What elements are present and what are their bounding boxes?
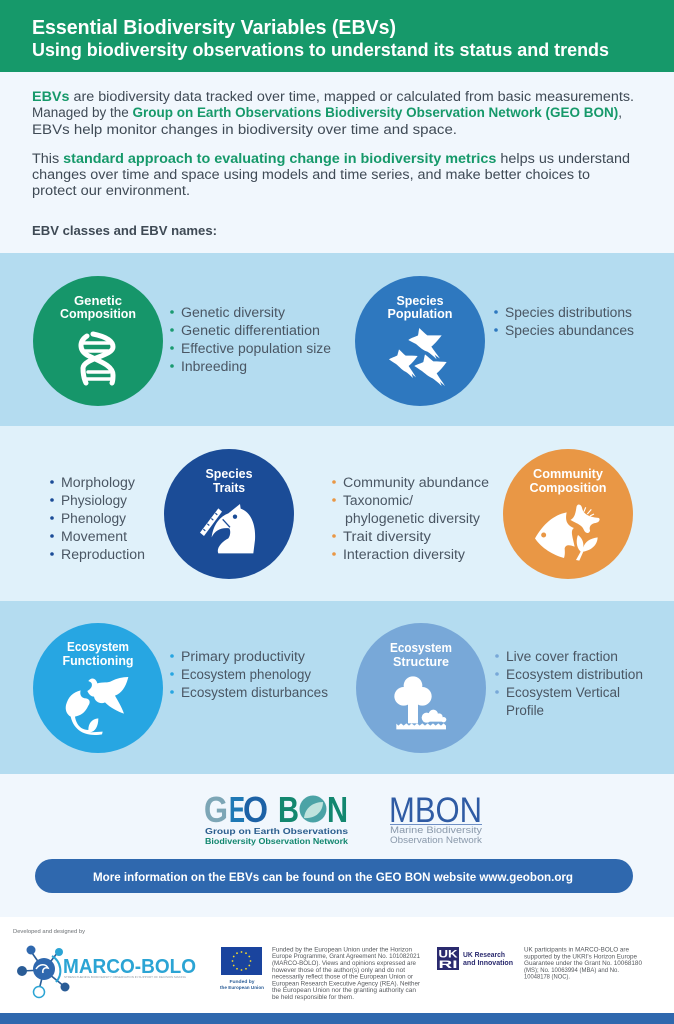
logo: MARCO-BOLO: STRENGTHENING BIODIVERSITY OBSERVATION IN SUPPORT OF DECISION MAKING <box>64 975 187 979</box>
list: genetic composition: Genetic diversity <box>181 305 285 320</box>
intro paragraph 1: Managed by the Group on Earth Observations Biodiversity Observation Network (GEO BON), <box>32 105 622 120</box>
logo: GEO BON: O <box>243 789 268 830</box>
logo: UKRI <box>437 947 513 971</box>
list: species traits: Reproduction <box>61 547 145 562</box>
UK funding statement: Guarantee under the Grant No. 10068180 <box>524 960 643 967</box>
intro paragraph 2: changes over time and space using models and time series, and make better choices to <box>32 167 590 182</box>
list: ecosystem functioning <box>170 649 328 700</box>
footer <box>0 917 674 1013</box>
list: species traits: Movement <box>61 529 127 544</box>
list: ecosystem structure <box>495 649 643 718</box>
panel: ecosystem structure: Ecosystem <box>390 641 452 655</box>
intro paragraph 2 <box>32 151 630 198</box>
panel: species traits: Traits <box>213 481 245 495</box>
list: species traits <box>50 475 145 562</box>
logo: European Union flag: the European Union <box>220 985 264 990</box>
list: community composition: phylogenetic diversity <box>345 511 480 526</box>
panel: species population <box>355 276 485 406</box>
list: ecosystem functioning: Ecosystem phenology <box>181 667 311 682</box>
logo: UKRI: UK <box>438 948 458 960</box>
funding statement: however those of the author(s) only and do not <box>272 967 405 974</box>
logo: MBON: MBON <box>389 791 482 830</box>
list: species traits: Physiology <box>61 493 127 508</box>
UK funding statement: supported by the UKRI's Horizon Europe <box>524 954 638 960</box>
logo: GEO BON: Biodiversity Observation Network <box>205 837 349 846</box>
funding statement: European Research Executive Agency (REA). Neither <box>272 980 420 988</box>
list: species traits: Phenology <box>61 511 126 526</box>
funding statement: necessarily reflect those of the European Union or <box>272 974 413 980</box>
list: community composition: Trait diversity <box>343 529 431 544</box>
section heading: EBV classes and EBV names: <box>32 223 217 238</box>
title: Essential Biodiversity Variables (EBVs) <box>32 17 396 39</box>
intro paragraph 2: This standard approach to evaluating change in biodiversity metrics helps us understand <box>32 151 630 166</box>
list: ecosystem functioning: Primary productivity <box>181 649 305 664</box>
logo: GEO BON: Group on Earth Observations <box>205 827 349 836</box>
UK funding statement: UK participants in MARCO-BOLO are <box>524 946 630 954</box>
intro paragraph 1: EBVs are biodiversity data tracked over time, mapped or calculated from basic measurements. <box>32 89 634 104</box>
panel: ecosystem functioning: Functioning <box>62 654 134 668</box>
funding statement: (MARCO-BOLO). Views and opinions expressed are <box>272 960 417 967</box>
list: community composition: Taxonomic/ <box>343 493 413 508</box>
logo: UKRI: UK Research <box>463 952 505 959</box>
list: species population: Species distributions <box>505 305 632 320</box>
intro paragraph 1: EBVs help monitor changes in biodiversity over time and space. <box>32 122 457 137</box>
footer: Developed and designed by <box>13 929 85 935</box>
logo: GEO BON: N <box>327 789 348 830</box>
funding statement: the European Union nor the granting authority can <box>272 987 417 994</box>
panel: species population: Population <box>388 307 452 321</box>
logo: MARCO-BOLO: MARCO-BOLO <box>63 956 196 978</box>
UK funding statement: (MS); No. 10063994 (MBA) and No. <box>524 967 619 974</box>
logo: UKRI: and Innovation <box>463 960 513 967</box>
icon: tree and bush <box>394 676 446 729</box>
list: species traits: Morphology <box>61 475 135 490</box>
panel: ecosystem structure <box>356 623 486 753</box>
icon: dna helix <box>81 334 113 383</box>
logo: MBON <box>389 791 483 845</box>
list: ecosystem functioning: Ecosystem disturbances <box>181 685 328 700</box>
logo: MARCO-BOLO <box>17 946 196 998</box>
list: ecosystem structure: Profile <box>506 703 544 718</box>
logo: MBON: Observation Network <box>390 835 483 845</box>
panel: ecosystem functioning <box>33 623 163 753</box>
logo: European Union flag <box>220 947 264 990</box>
UK funding statement: 10048178 (NOC). <box>524 974 570 980</box>
logo: MBON: Marine Biodiversity <box>390 825 483 835</box>
panel: community composition: Community <box>533 467 603 481</box>
list: ecosystem structure: Live cover fraction <box>506 649 618 664</box>
panel: genetic composition <box>33 276 163 406</box>
panel: species traits <box>164 449 294 579</box>
panel: community composition <box>503 449 633 579</box>
list: genetic composition: Inbreeding <box>181 359 247 374</box>
call to action button <box>35 859 633 893</box>
logo: GEO BON: G <box>204 789 228 830</box>
call to action button: More information on the EBVs can be found on the GEO BON website www.geobon.org <box>93 870 573 884</box>
icon: fish, coral and plant <box>535 504 600 561</box>
panel: species traits: Species <box>206 467 253 481</box>
list: species population <box>494 305 634 338</box>
funding statement: be held responsible for them. <box>272 994 354 1001</box>
list: ecosystem structure: Ecosystem Vertical <box>506 685 620 700</box>
funding statement: Funded by the European Union under the Horizon <box>272 946 413 954</box>
icon: bird head with ruler <box>200 504 255 553</box>
icon: birds <box>389 328 447 386</box>
panel: genetic composition: Composition <box>60 307 136 321</box>
UK funding statement <box>524 946 643 980</box>
list: genetic composition <box>170 305 331 374</box>
logo: GEO BON <box>204 789 349 846</box>
list: genetic composition: Genetic differentiation <box>181 323 320 338</box>
logo: GEO BON: E <box>229 789 245 830</box>
funding statement: Europe Programme, Grant Agreement No. 101082021 <box>272 953 421 960</box>
intro paragraph 2: protect our environment. <box>32 183 190 198</box>
panel: community composition: Composition <box>530 481 606 495</box>
funding statement <box>272 946 421 1001</box>
list: community composition: Interaction diversity <box>343 547 465 562</box>
list: species population: Species abundances <box>505 323 634 338</box>
panel: ecosystem structure: Structure <box>393 655 449 669</box>
logo: GEO BON: B <box>278 789 299 830</box>
header banner <box>0 0 674 72</box>
subtitle: Using biodiversity observations to understand its status and trends <box>32 39 609 60</box>
panel: ecosystem functioning: Ecosystem <box>67 640 129 654</box>
panel: species population: Species <box>396 294 444 308</box>
bottom bar <box>0 1013 674 1024</box>
logo: European Union flag: Funded by <box>230 979 255 984</box>
list: community composition: Community abundance <box>343 475 489 490</box>
icon: bee and tulip <box>66 677 128 735</box>
panel: genetic composition: Genetic <box>74 294 122 308</box>
logo: UKRI: RI <box>438 959 458 971</box>
intro paragraph 1 <box>32 89 634 137</box>
list: community composition <box>332 475 489 562</box>
list: genetic composition: Effective population size <box>181 341 331 356</box>
band backgrounds <box>0 253 674 426</box>
list: ecosystem structure: Ecosystem distribution <box>506 667 643 682</box>
